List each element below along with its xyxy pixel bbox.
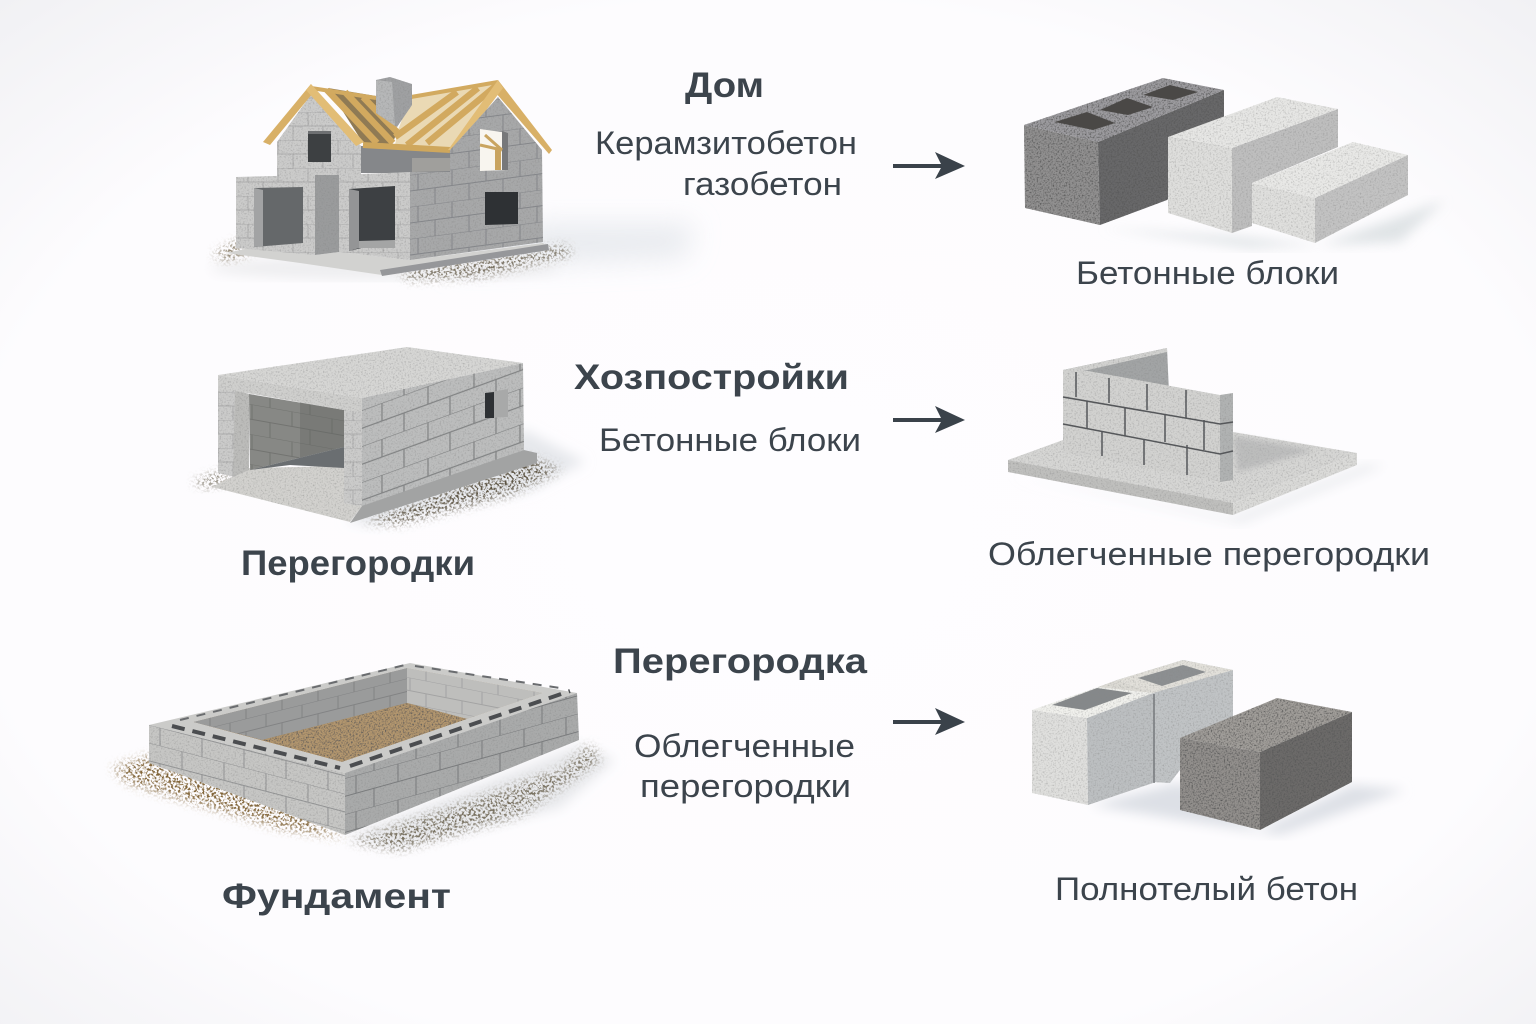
slab [226, 243, 549, 276]
text: Облегченные: Облегченные [634, 728, 855, 764]
panel: wall on slab [1008, 348, 1385, 523]
text: газобетон: газобетон [683, 166, 842, 202]
upper left gable [277, 93, 361, 177]
soil base [193, 668, 543, 762]
text: перегородки: перегородки [640, 768, 851, 804]
heading: Фундамент: Фундамент [222, 877, 451, 916]
arrow 1 [893, 152, 965, 179]
shadow on slab [1233, 436, 1315, 472]
block divider [1153, 694, 1155, 783]
floor shadow [1010, 465, 1385, 523]
heading: Дом: Дом [685, 66, 764, 105]
slab [1008, 432, 1357, 515]
panel: foundation illustration [112, 663, 615, 850]
right wall [362, 363, 524, 506]
gravel [192, 458, 560, 524]
right wall [410, 97, 543, 260]
shadow [1090, 782, 1405, 835]
left pier [218, 378, 249, 477]
outer right wall [345, 693, 579, 835]
hollow block front [1032, 687, 1153, 805]
hollow block back [1098, 660, 1233, 783]
shadow [345, 430, 585, 525]
front wall [1063, 369, 1233, 482]
panel: concrete blocks trio [1024, 78, 1445, 248]
solid dark block [1180, 698, 1352, 830]
ground shadow [345, 745, 615, 848]
heading: Перегородка: Перегородка [613, 642, 868, 681]
upper left window [308, 131, 331, 162]
dirt [112, 745, 600, 850]
roof slab [218, 347, 523, 412]
caption: Бетонные блоки: Бетонные блоки [1076, 255, 1339, 291]
soil [262, 703, 467, 762]
text: Бетонные блоки: Бетонные блоки [599, 422, 861, 458]
front lower wall [236, 172, 410, 260]
heading: Хозпостройки: Хозпостройки [574, 358, 849, 397]
light block middle [1168, 97, 1338, 233]
middle recessed wall [361, 146, 450, 173]
front pier [315, 175, 339, 255]
panel: shed illustration [192, 347, 585, 525]
mortar joints [1063, 372, 1233, 475]
lower right window [485, 192, 518, 225]
caption: Облегченные перегородки: Облегченные перегородки [988, 536, 1430, 572]
ledge [350, 450, 537, 523]
shadow [1100, 200, 1445, 248]
back wall [1063, 348, 1169, 392]
garage openings [254, 186, 395, 251]
top rim [149, 663, 577, 773]
roof framing [263, 80, 552, 154]
rim hollows [172, 665, 570, 768]
light block front [1252, 142, 1408, 243]
arrow 3 [893, 708, 965, 735]
arrow 2 [893, 406, 965, 433]
inner floor [250, 447, 344, 470]
heading: Перегородки: Перегородки [241, 544, 475, 583]
back wall [249, 394, 344, 470]
slab [212, 466, 362, 522]
upper right window [480, 129, 508, 171]
chimney [376, 77, 412, 127]
debris [212, 238, 572, 280]
inner walls [193, 668, 543, 740]
shed window [485, 389, 508, 418]
panel: hollow and solid blocks [1032, 660, 1405, 835]
outer left wall [149, 725, 345, 835]
caption: Полнотелый бетон: Полнотелый бетон [1055, 871, 1358, 907]
ground shadow [210, 224, 695, 280]
dark hollow block [1024, 78, 1224, 225]
text: Керамзитобетон: Керамзитобетон [595, 125, 857, 161]
panel: house illustration [210, 77, 695, 280]
right pier [344, 400, 362, 506]
